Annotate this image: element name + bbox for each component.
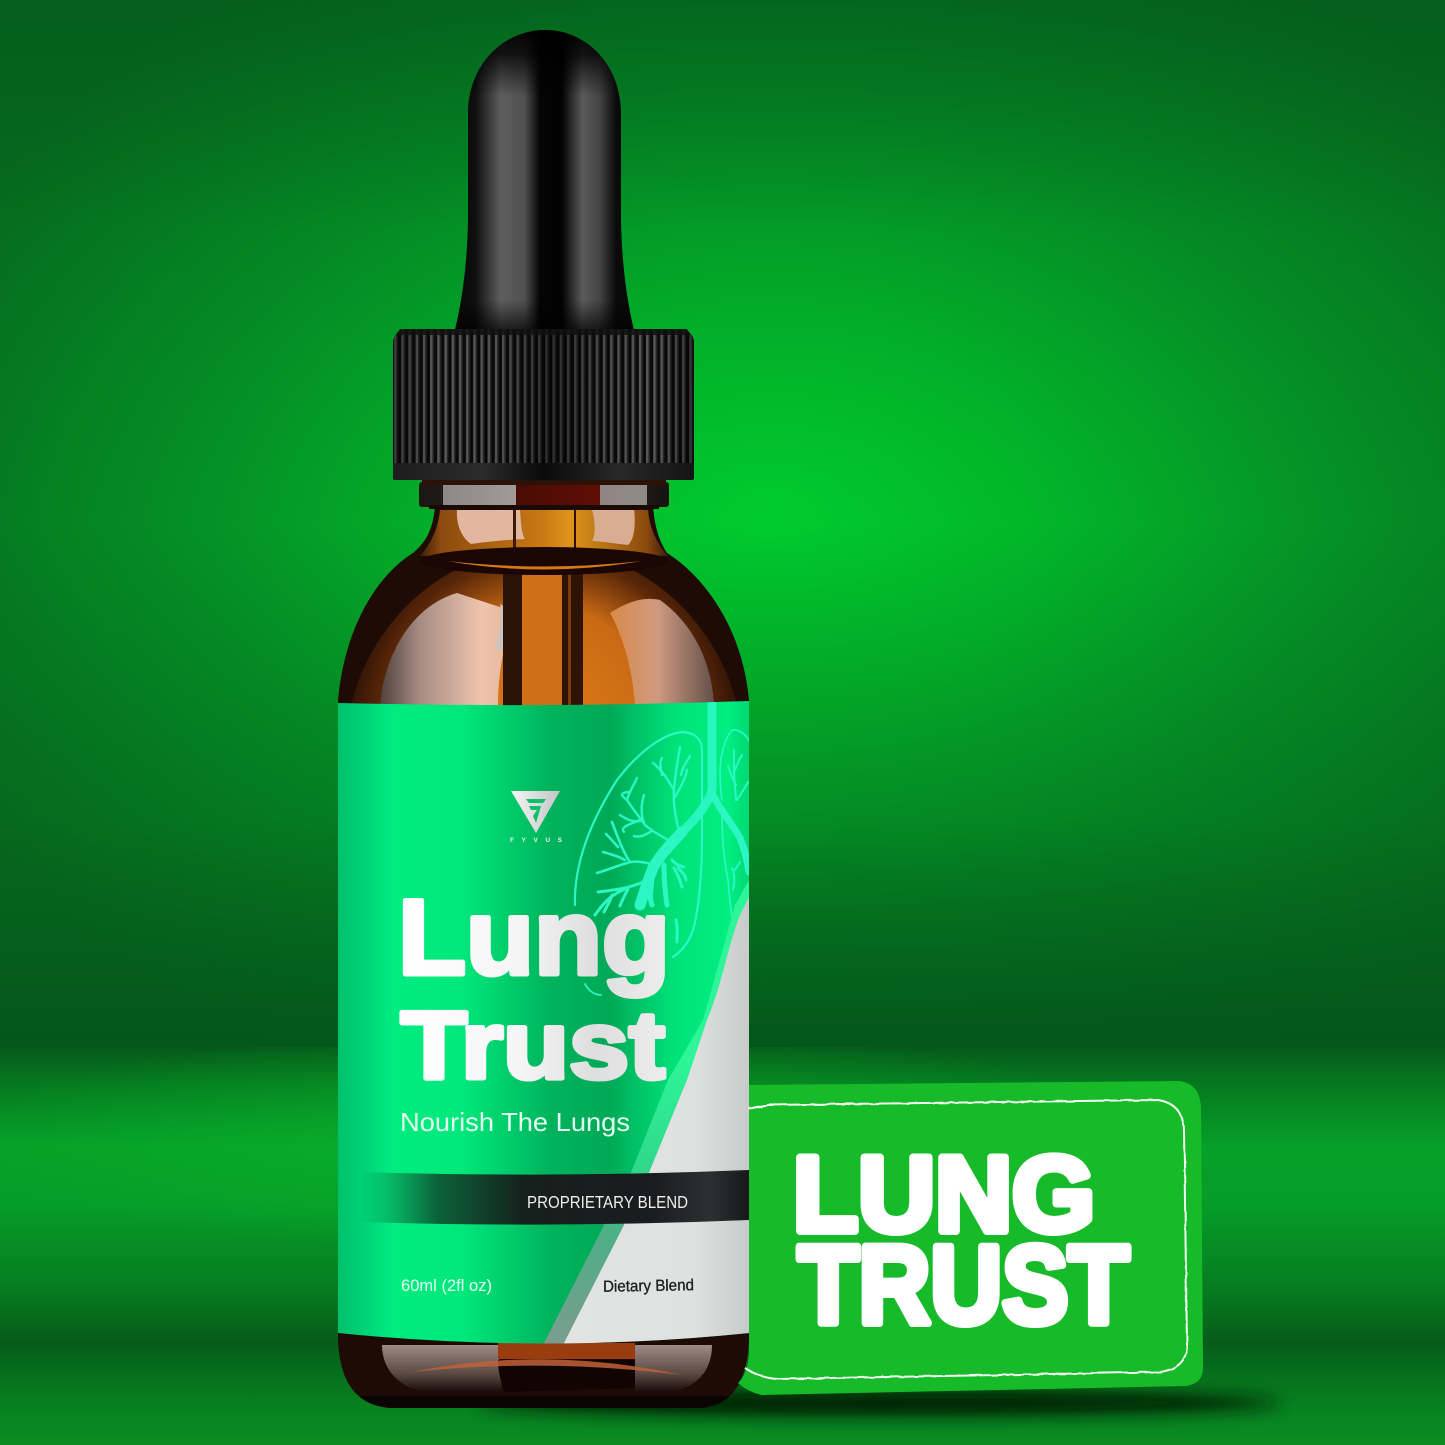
product name: Lung Trust — [398, 877, 670, 1099]
badge text: LUNG — [793, 1134, 1095, 1254]
dropper cap — [393, 329, 694, 480]
dropper tube — [503, 574, 522, 706]
brand logo: FYVUS — [510, 837, 563, 844]
collar ring — [419, 479, 669, 509]
badge text — [793, 1134, 1129, 1347]
brand logo — [510, 791, 563, 844]
product name: Lung Trust: Trust — [401, 992, 665, 1099]
volume text: 60ml (2fl oz) — [401, 1276, 492, 1295]
tagline: Nourish The Lungs — [400, 1107, 630, 1137]
badge: Lung Trust sticker — [738, 1081, 1203, 1395]
product name: Lung Trust: Lung — [398, 877, 670, 997]
dietary blend text: Dietary Blend — [603, 1277, 694, 1296]
blend band text: PROPRIETARY BLEND — [527, 1192, 688, 1212]
badge text: TRUST — [798, 1224, 1129, 1347]
product label — [330, 695, 760, 1355]
glass bottle — [330, 500, 760, 1415]
base highlights — [382, 1345, 502, 1392]
grey panel — [563, 897, 760, 1355]
liquid surface — [420, 547, 668, 575]
lung illustration — [575, 703, 755, 995]
diagonal light stripe — [543, 880, 749, 1345]
black band — [360, 1170, 749, 1225]
dropper bulb — [455, 30, 634, 330]
neck amber glass — [420, 510, 668, 556]
shoulder amber interior — [352, 570, 736, 706]
